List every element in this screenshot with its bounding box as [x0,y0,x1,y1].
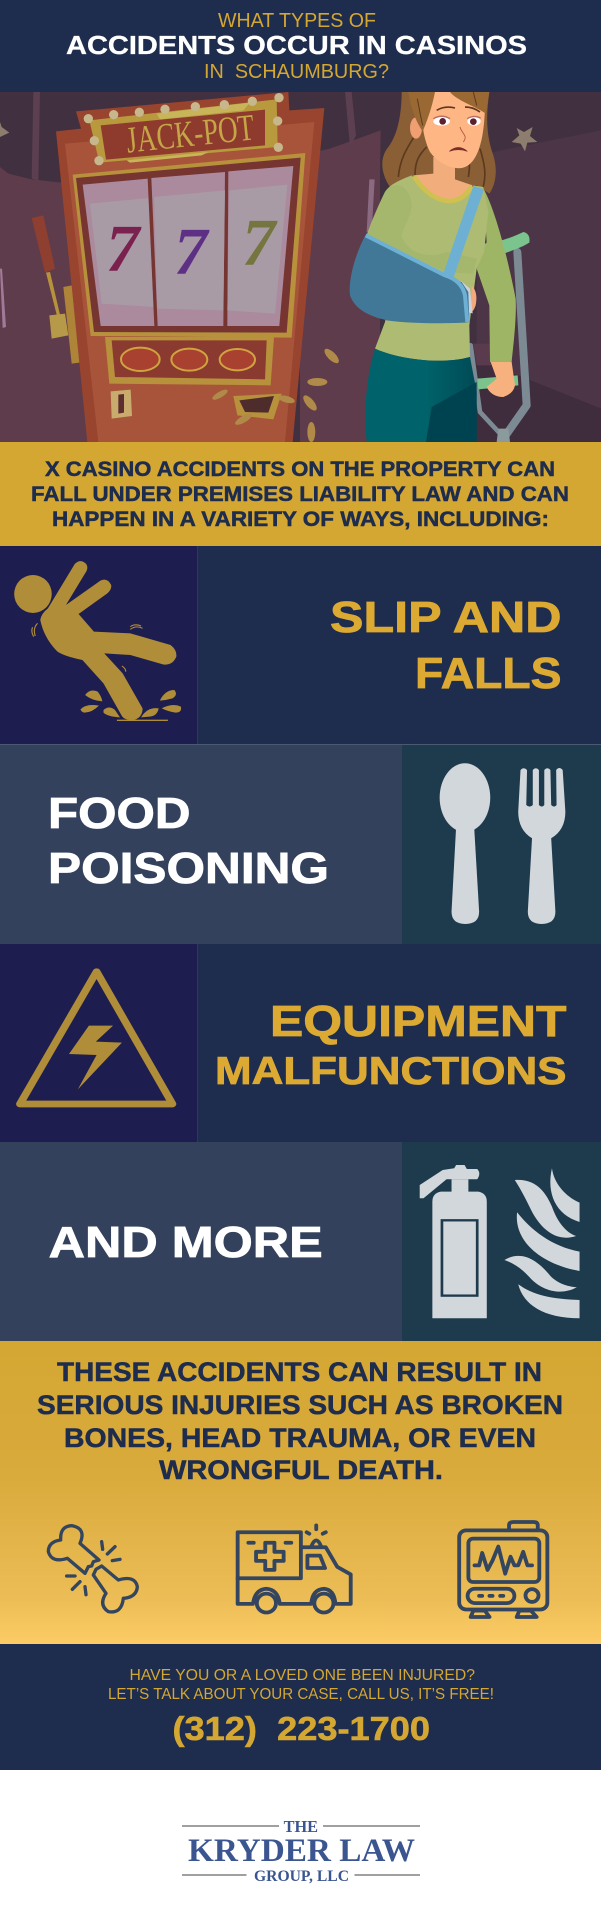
icon: spoon and fork [440,763,565,924]
heading line: what types of: WHAT TYPES OF [218,10,376,32]
hand [471,285,476,312]
sevens [106,206,278,289]
intro text [31,458,569,531]
sweater [367,175,488,361]
logo: The Kryder Law Group: GROUP, LLC [254,1868,349,1885]
crutch hand grip [477,375,518,389]
heading: and more: AND MORE [49,1218,323,1267]
heading: equipment malfunctions: EQUIPMENT [270,997,567,1046]
logo: The Kryder Law Group: KRYDER LAW [188,1833,415,1869]
panel: food poisoning [0,745,601,944]
icon: slipping person [14,561,181,721]
coin slot [111,390,132,419]
injuries text: THESE ACCIDENTS CAN RESULT IN [57,1357,542,1387]
icon: star [512,127,537,151]
panel: call to action [0,1644,601,1770]
bulbs [84,93,284,165]
machine body [32,92,324,442]
icon: fire extinguisher and flames [420,1165,580,1318]
sevens: 7 [242,206,278,279]
sevens: 7 [174,216,210,289]
intro band [0,442,601,546]
call to action text: HAVE YOU OR A LOVED ONE BEEN INJURED? [130,1667,475,1684]
phone number: (312) 223-1700 [172,1710,430,1747]
heading: food poisoning: FOOD [48,789,190,838]
heading line: in Schaumburg: IN SCHAUMBURG? [204,61,389,83]
heading: equipment malfunctions: MALFUNCTIONS [215,1050,566,1093]
panel: equipment malfunctions [0,944,601,1142]
heading: food poisoning [48,789,329,893]
injuries text: WRONGFUL DEATH. [159,1455,443,1485]
main title: ACCIDENTS OCCUR IN CASINOS [66,30,527,60]
icon: ambulance [238,1525,351,1612]
heading: food poisoning: POISONING [48,844,329,893]
logo: The Kryder Law Group: THE [284,1817,318,1836]
icon: small star [0,122,9,137]
background buildings right [300,92,601,442]
jackpot sign [89,99,278,163]
injuries text [37,1357,563,1485]
header banner [0,0,601,92]
sleeve [477,189,516,362]
icon: broken bone [48,1526,137,1612]
injuries text: BONES, HEAD TRAUMA, OR EVEN [64,1423,536,1453]
slot machine and left background [0,92,341,442]
face [408,92,489,168]
heading: slip and falls: FALLS [415,649,562,698]
illustration: casino scene [0,92,601,442]
pants [365,349,477,442]
sling [350,236,469,323]
intro text: X CASINO ACCIDENTS ON THE PROPERTY CAN [45,458,555,481]
injuries text: SERIOUS INJURIES SUCH AS BROKEN [37,1390,563,1420]
panel: and more [0,1142,601,1341]
button panel [105,337,274,385]
hair [382,92,496,194]
coins [211,347,341,442]
sevens: 7 [106,212,142,285]
heading: slip and falls [330,593,562,698]
intro text: HAPPEN IN A VARIETY OF WAYS, INCLUDING: [52,508,549,531]
panel: slip and falls [0,546,601,745]
coin tray [233,394,282,419]
woman with sling and crutch [350,92,530,442]
logo: The Kryder Law Group [182,1817,420,1885]
heading: equipment malfunctions [215,997,567,1093]
icon: electric warning triangle [20,972,172,1104]
neck and chest [413,157,473,209]
panel: injuries [0,1341,601,1644]
crutch [471,252,527,439]
lever [32,215,79,364]
heading: slip and falls: SLIP AND [330,593,562,642]
reels [73,153,305,338]
jackpot sign: JACK-POT [124,107,256,162]
intro text: FALL UNDER PREMISES LIABILITY LAW AND CAN [31,483,569,506]
call to action text: LET’S TALK ABOUT YOUR CASE, CALL US, IT’S FREE! [108,1686,494,1703]
icon: heart monitor [459,1522,547,1617]
call to action text [108,1667,494,1703]
